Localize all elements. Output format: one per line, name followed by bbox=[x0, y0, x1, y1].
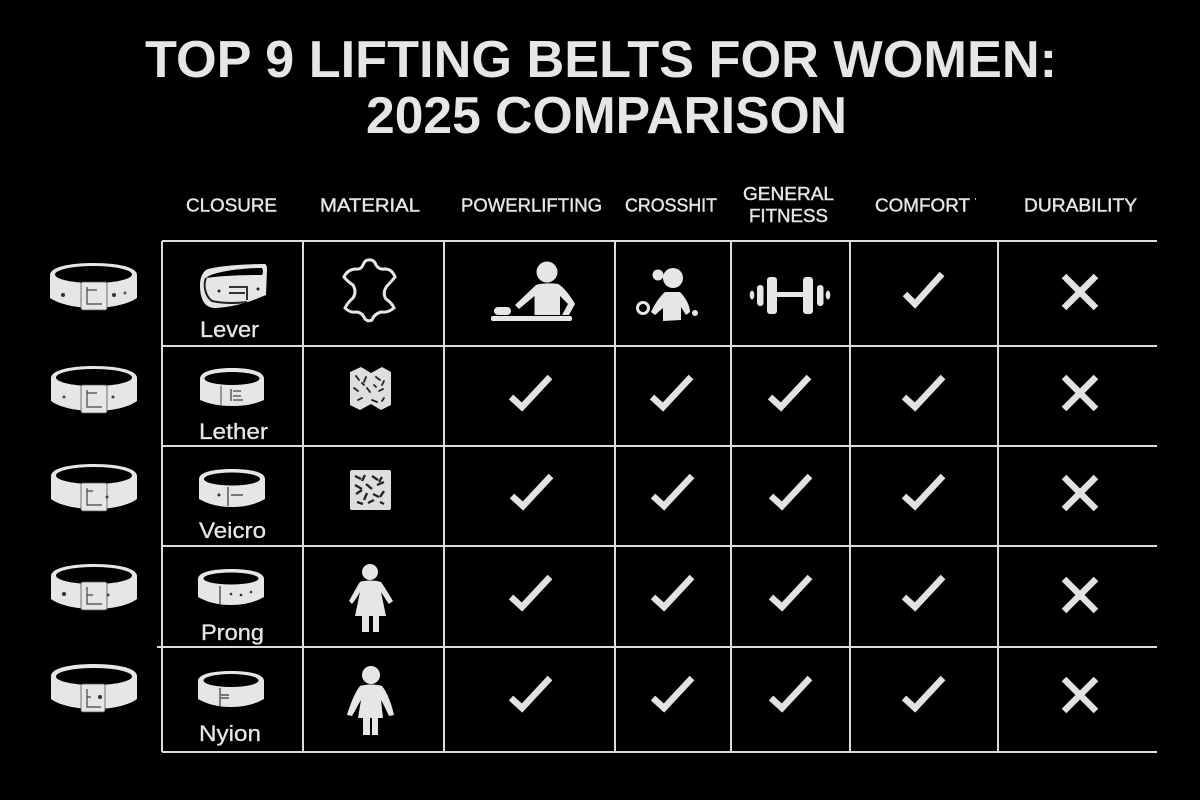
title: 2025 COMPARISON bbox=[366, 87, 847, 145]
powerlifting icon bbox=[491, 262, 575, 321]
material: female figure icon 2 bbox=[347, 666, 394, 735]
column headers: CLOSURE bbox=[186, 194, 277, 216]
label: Nyion: Nyion bbox=[199, 721, 261, 746]
column headers: DURABILITY bbox=[1024, 194, 1137, 216]
label: Veicro: Veicro bbox=[199, 518, 266, 543]
title: TOP 9 LIFTING BELTS FOR WOMEN: bbox=[145, 31, 1057, 89]
comfort and suitability check marks bbox=[511, 274, 943, 708]
material: female figure icon 1 bbox=[349, 564, 393, 632]
closure: lever bbox=[200, 264, 267, 342]
closure: nylon bbox=[198, 671, 264, 746]
row belt icon 3 bbox=[51, 464, 137, 511]
label: Prong: Prong bbox=[201, 620, 264, 645]
row belt icon 1 bbox=[50, 263, 137, 310]
column headers: CROSSHIT bbox=[625, 194, 717, 216]
material: mesh square icon bbox=[350, 470, 391, 510]
row 1 crossfit icon bbox=[638, 268, 698, 321]
column headers: FITNESS bbox=[749, 205, 828, 226]
column headers: POWERLIFTING bbox=[461, 194, 602, 216]
material: woven fabric icon bbox=[350, 367, 391, 410]
row belt icon 2 bbox=[51, 366, 137, 413]
row belt icon 4 bbox=[51, 564, 137, 610]
row belt icon 5 bbox=[51, 664, 137, 712]
durability cross marks bbox=[1064, 276, 1096, 711]
closure: velcro bbox=[199, 469, 266, 543]
column headers: MATERIAL bbox=[320, 194, 420, 216]
label: Lether: Lether bbox=[199, 419, 268, 444]
general fitness dumbbell icon bbox=[750, 277, 830, 314]
column headers: GENERAL bbox=[743, 183, 834, 204]
title bbox=[145, 31, 1057, 145]
column headers: COMFORT bbox=[875, 194, 970, 216]
label: Lever: Lever bbox=[200, 317, 259, 342]
closure: leather bbox=[199, 368, 268, 444]
material: leather hide icon bbox=[344, 260, 395, 321]
closure: prong bbox=[198, 569, 264, 645]
column headers bbox=[186, 183, 1137, 226]
